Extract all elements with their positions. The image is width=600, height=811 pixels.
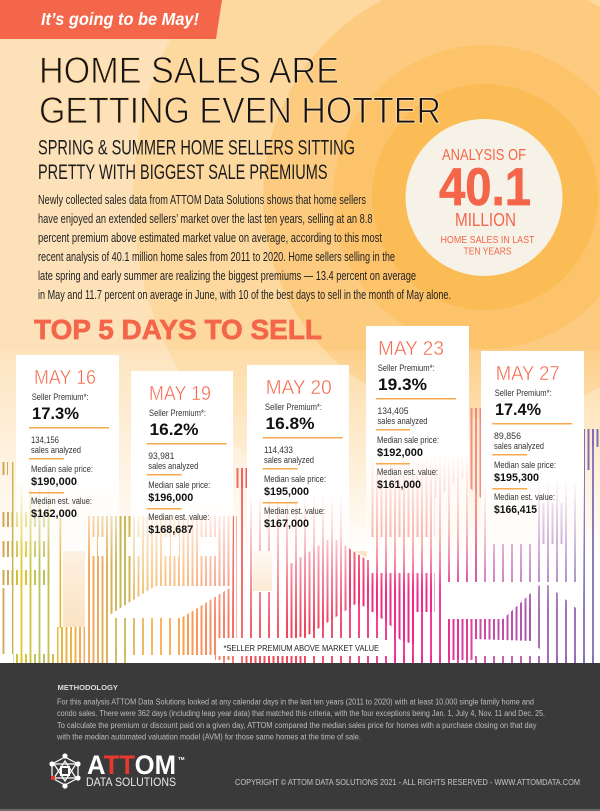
card: May 16: Median est. value: bbox=[31, 496, 92, 506]
card: May 23: $192,000 bbox=[377, 447, 423, 459]
title: GETTING EVEN HOTTER bbox=[39, 89, 441, 131]
methodology text: with the median automated valuation model (AVM) for those same homes at the time of sale. bbox=[56, 732, 361, 742]
card: May 27 bbox=[481, 351, 584, 611]
title: HOME SALES ARE bbox=[39, 49, 339, 91]
card: May 16: $162,000 bbox=[31, 508, 77, 520]
card: May 20: $195,000 bbox=[264, 486, 309, 498]
card: May 16: 134,156 bbox=[31, 435, 59, 445]
card: May 23 bbox=[366, 326, 469, 586]
callout: analysis of 40.1 million: 40.1 bbox=[439, 158, 531, 217]
card: May 19 bbox=[131, 371, 233, 621]
card: May 23: Seller Premium*: bbox=[378, 363, 435, 373]
card: May 19: Median sale price: bbox=[148, 480, 210, 490]
footnote: seller premium: *SELLER PREMIUM ABOVE MARKET VALUE bbox=[224, 643, 379, 653]
card: May 27: 89,856 bbox=[494, 431, 521, 441]
card: May 27: $195,300 bbox=[494, 472, 539, 484]
card: May 16: Seller Premium*: bbox=[32, 392, 89, 402]
card: May 20: sales analyzed bbox=[264, 455, 314, 465]
card: May 16: sales analyzed bbox=[31, 445, 81, 455]
callout: analysis of 40.1 million: TEN YEARS bbox=[464, 246, 512, 258]
card: May 27: Median sale price: bbox=[494, 460, 556, 470]
card: May 23: Median est. value: bbox=[377, 467, 438, 477]
card: May 20: 114,433 bbox=[264, 445, 293, 455]
heading: top 5 days to sell: TOP 5 DAYS TO SELL bbox=[34, 314, 322, 345]
subtitle: PRETTY WITH BIGGEST SALE PREMIUMS bbox=[38, 161, 328, 184]
footer panel bbox=[0, 663, 600, 811]
card: May 20 bbox=[247, 365, 349, 625]
logo wordmark: ATTOM Data Solutions: ATTOM bbox=[87, 750, 176, 780]
callout: analysis of 40.1 million bbox=[406, 119, 562, 276]
methodology text bbox=[56, 683, 545, 742]
card: May 23: $161,000 bbox=[377, 479, 421, 491]
striped house skyline bbox=[2, 408, 598, 663]
card: May 16: $190,000 bbox=[31, 476, 77, 488]
card: May 16 bbox=[16, 355, 119, 565]
card: May 27: MAY 27 bbox=[496, 362, 560, 385]
card: May 19: MAY 19 bbox=[149, 382, 211, 405]
card: May 27: 17.4% bbox=[495, 401, 541, 419]
methodology text: For this analysis ATTOM Data Solutions looked at any calendar days in the last ten years (2011 to 2020) with at least 10,000 single family home and bbox=[57, 698, 534, 706]
logo wordmark: ATTOM Data Solutions: TM bbox=[178, 756, 185, 761]
card: May 27: Median est. value: bbox=[494, 492, 555, 502]
card: May 19: $196,000 bbox=[148, 492, 193, 504]
card: May 23: Median sale price: bbox=[377, 435, 439, 445]
copyright line: COPYRIGHT © ATTOM DATA SOLUTIONS 2021 - ALL RIGHTS RESERVED - WWW.ATTOMDATA.COM bbox=[235, 778, 580, 787]
intro paragraph: Newly collected sales data from ATTOM Data Solutions shows that home sellers bbox=[38, 192, 366, 207]
card: May 19: 93,981 bbox=[148, 451, 174, 461]
methodology text: METHODOLOGY bbox=[58, 683, 118, 692]
callout: analysis of 40.1 million: HOME SALES IN LAST bbox=[440, 234, 535, 246]
subtitle bbox=[38, 136, 355, 184]
card: May 27: $166,415 bbox=[494, 504, 537, 516]
icon: ATTOM logo mark bbox=[50, 754, 80, 788]
card: May 20: Seller Premium*: bbox=[265, 402, 322, 412]
banner: It's going to be May bbox=[0, 0, 222, 39]
card: May 20: $167,000 bbox=[264, 518, 309, 530]
intro paragraph: late spring and early summer are realizing the biggest premiums — 13.4 percent on average bbox=[38, 268, 416, 283]
card: May 19: $168,687 bbox=[148, 524, 193, 536]
subtitle: SPRING & SUMMER HOME SELLERS SITTING bbox=[38, 136, 355, 160]
intro paragraph: recent analysis of 40.1 million home sales from 2011 to 2020. Home sellers selling in the bbox=[38, 249, 395, 264]
callout: analysis of 40.1 million: ANALYSIS OF bbox=[442, 147, 526, 164]
card: May 23: sales analyzed bbox=[378, 416, 428, 426]
intro paragraph: have enjoyed an extended sellers’ market over the last ten years, selling at an 8.8 bbox=[38, 211, 372, 226]
callout: analysis of 40.1 million: MILLION bbox=[455, 210, 516, 230]
card: May 27: sales analyzed bbox=[494, 441, 544, 451]
methodology text: To calculate the premium or discount paid on a given day, ATTOM compared the median sales price for homes with a purchase closing on that day bbox=[57, 721, 536, 730]
title bbox=[39, 49, 441, 131]
card: May 16: 17.3% bbox=[32, 405, 79, 423]
intro paragraph bbox=[38, 192, 451, 302]
methodology text: condo sales. There were 362 days (including leap year data) that matched this criteria, with the four exceptions being Jan. 1, July 4, Nov. 11 and Dec. 25. bbox=[57, 709, 545, 718]
card: May 20: Median sale price: bbox=[264, 474, 326, 484]
card: May 23: 19.3% bbox=[378, 376, 427, 394]
card: May 16: MAY 16 bbox=[34, 366, 96, 389]
banner: It's going to be May: It’s going to be May! bbox=[41, 9, 199, 29]
card: May 19: sales analyzed bbox=[148, 461, 198, 471]
card: May 19: 16.2% bbox=[150, 421, 199, 439]
card: May 16: Median sale price: bbox=[31, 464, 93, 474]
card: May 23: MAY 23 bbox=[378, 337, 444, 360]
logo wordmark: ATTOM Data Solutions: DATA SOLUTIONS bbox=[86, 777, 176, 789]
card: May 19: Median est. value: bbox=[148, 512, 209, 522]
card: May 23: 134,405 bbox=[378, 406, 408, 416]
card: May 20: MAY 20 bbox=[266, 376, 332, 399]
card: May 20: Median est. value: bbox=[264, 506, 325, 516]
intro paragraph: percent premium above estimated market value on average, according to this most bbox=[38, 230, 382, 245]
card: May 27: Seller Premium*: bbox=[495, 388, 552, 398]
card: May 19: Seller Premium*: bbox=[149, 408, 206, 418]
card: May 20: 16.8% bbox=[266, 415, 315, 433]
house doors bbox=[63, 551, 367, 627]
